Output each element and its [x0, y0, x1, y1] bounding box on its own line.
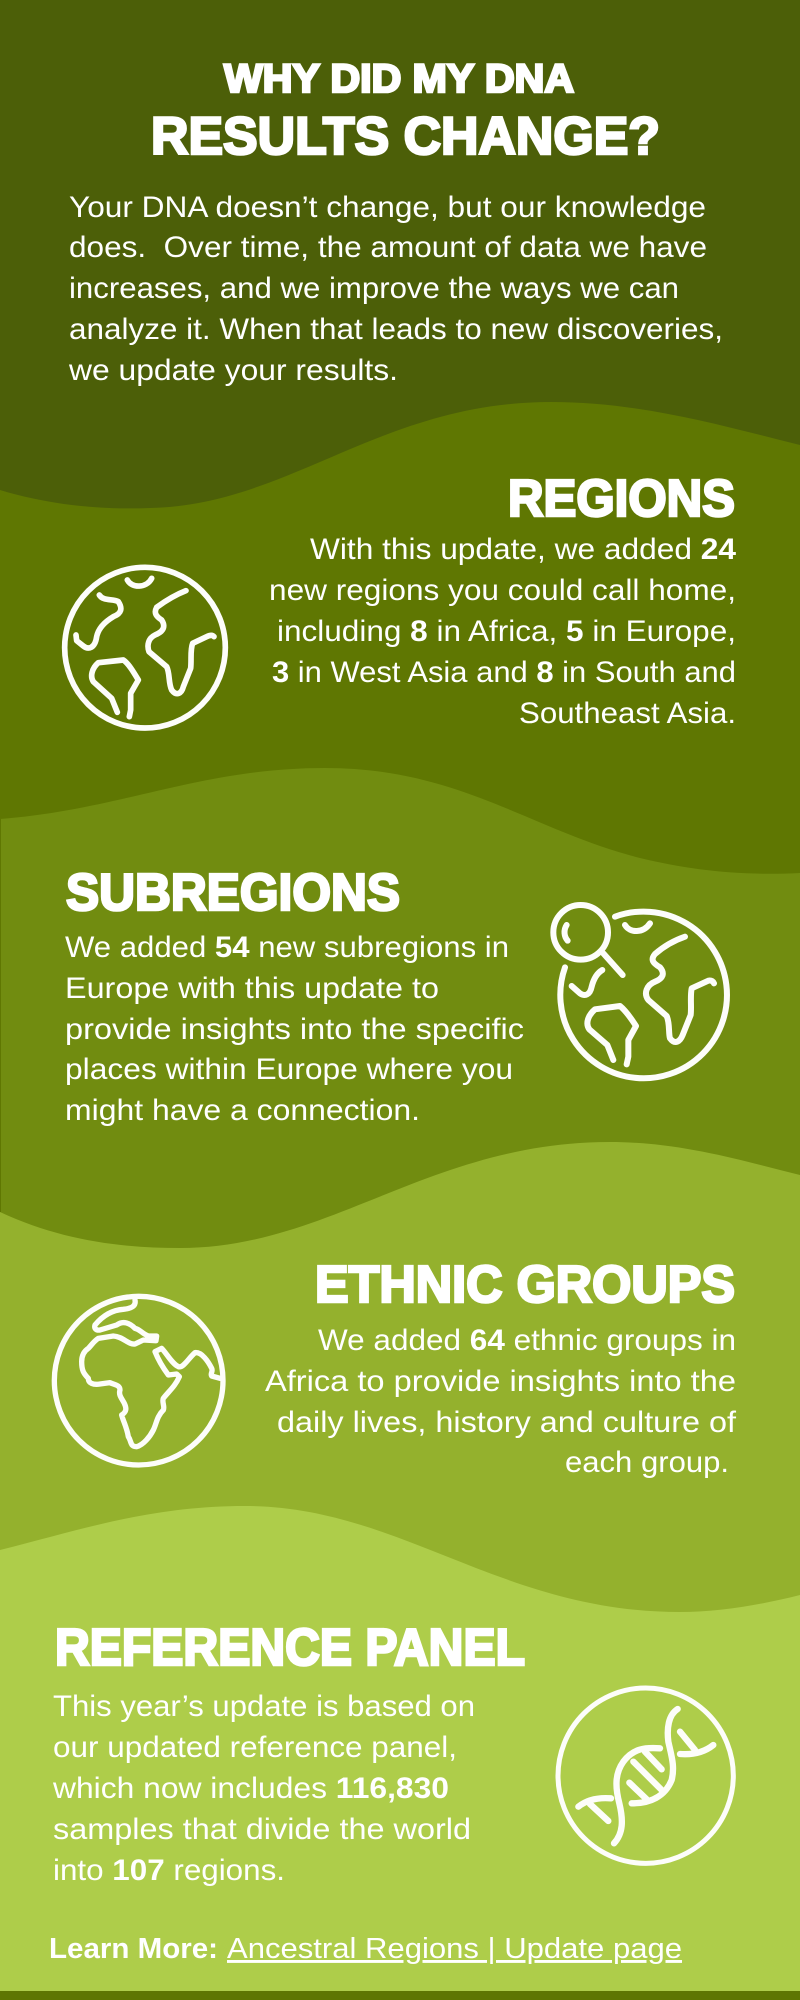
wave background: ethnic groups: [0, 1142, 800, 2000]
text block: regions: With this update, we added 24: [310, 533, 736, 566]
title: RESULTS CHANGE?: [151, 107, 660, 166]
title: [151, 57, 660, 166]
heading: reference panel: REFERENCE PANEL: [55, 1619, 525, 1677]
intro text: does. Over time, the amount of data we have: [69, 231, 707, 264]
intro text: Your DNA doesn’t change, but our knowledge: [69, 191, 706, 224]
intro text: we update your results.: [68, 354, 398, 387]
wave background: subregions: [0, 768, 800, 2000]
heading: ethnic groups: ETHNIC GROUPS: [315, 1256, 735, 1314]
heading: regions: REGIONS: [508, 470, 735, 528]
text block: regions: including 8 in Africa, 5 in Europe,: [277, 615, 736, 648]
wave background: regions: [0, 402, 800, 2000]
panel: reference panel: [52, 1619, 733, 1887]
text block: reference panel: our updated reference panel,: [53, 1731, 457, 1764]
panel: regions: [65, 470, 736, 730]
text block: subregions: provide insights into the specific: [65, 1013, 524, 1046]
panel: ethnic groups: [54, 1256, 737, 1479]
text block: reference panel: This year’s update is based on: [53, 1690, 475, 1723]
icon: globe with magnifier: [553, 905, 727, 1078]
text block: subregions: We added 54 new subregions in: [65, 931, 509, 964]
text block: ethnic groups: [265, 1324, 737, 1479]
text block: reference panel: into 107 regions.: [53, 1854, 285, 1887]
intro text: analyze it. When that leads to new discoveries,: [69, 313, 723, 346]
learn more links: Ancestral Regions | Update page: [227, 1933, 682, 1965]
text block: ethnic groups: daily lives, history and culture of: [277, 1406, 737, 1439]
text block: ethnic groups: Africa to provide insights into the: [265, 1365, 736, 1398]
text block: subregions: [65, 931, 524, 1127]
text block: ethnic groups: each group.: [565, 1446, 729, 1479]
panel: subregions: [65, 864, 727, 1127]
icon: DNA helix: [558, 1688, 733, 1863]
wave background: reference panel: [0, 1506, 800, 2000]
text block: regions: [269, 533, 736, 730]
text block: subregions: might have a connection.: [65, 1094, 420, 1127]
learn more links: Learn More:: [49, 1933, 218, 1965]
text block: subregions: Europe with this update to: [65, 972, 439, 1005]
intro text: increases, and we improve the ways we can: [69, 272, 679, 305]
text block: subregions: places within Europe where you: [65, 1053, 513, 1086]
text block: regions: new regions you could call home,: [269, 574, 736, 607]
text block: regions: Southeast Asia.: [519, 697, 736, 730]
bottom band: [0, 1991, 800, 2000]
text block: reference panel: [52, 1690, 475, 1887]
learn more links: [49, 1933, 682, 1965]
text block: regions: 3 in West Asia and 8 in South and: [272, 656, 736, 689]
heading: subregions: SUBREGIONS: [66, 864, 400, 922]
title: WHY DID MY DNA: [224, 57, 574, 101]
text block: reference panel: which now includes 116,830: [52, 1772, 449, 1805]
text block: ethnic groups: We added 64 ethnic groups in: [318, 1324, 736, 1357]
text block: reference panel: samples that divide the world: [53, 1813, 471, 1846]
intro text: [68, 191, 723, 387]
icon: globe: [65, 567, 225, 728]
icon: globe showing Africa: [54, 1296, 223, 1465]
